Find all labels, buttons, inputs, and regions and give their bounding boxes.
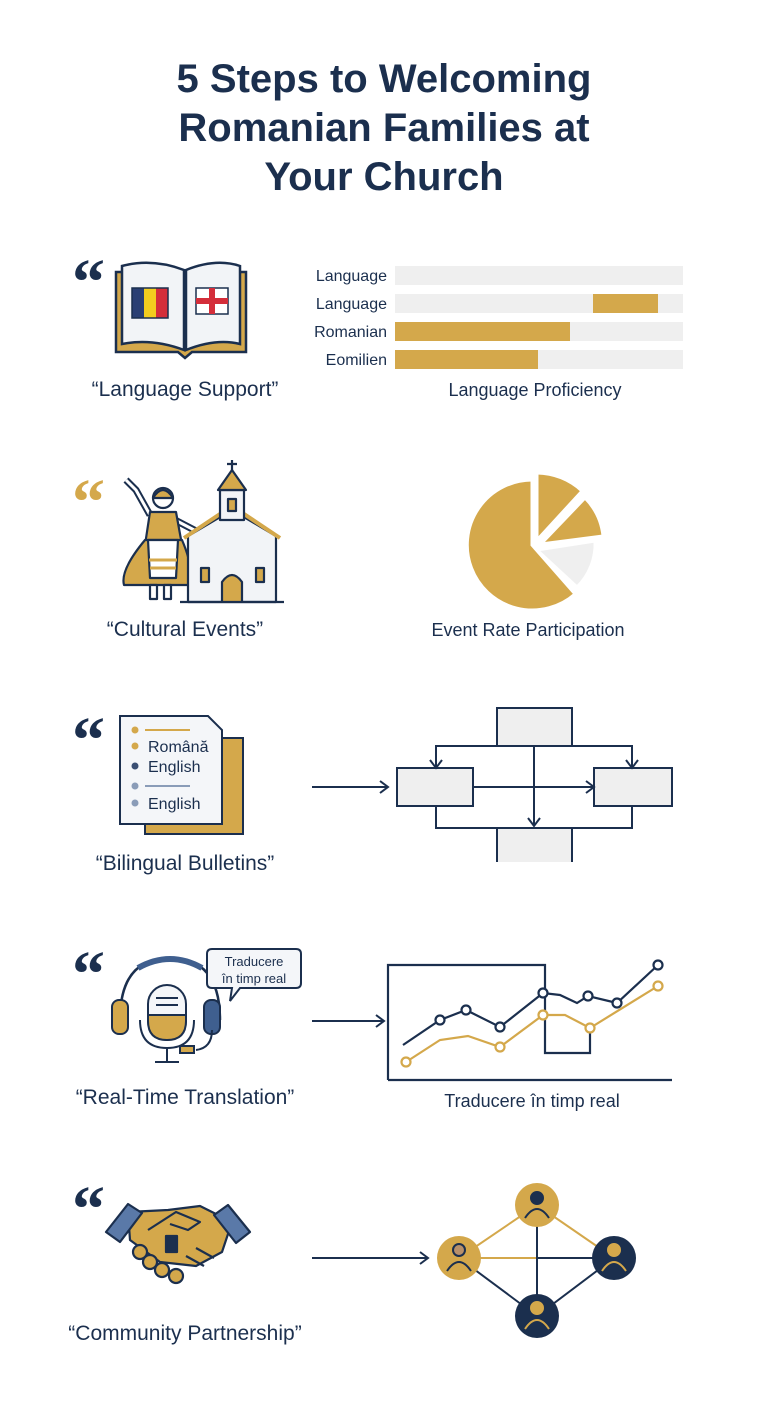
arrow [312,1252,428,1264]
icon: dancer and church [123,460,284,602]
title [177,57,591,199]
icon: quote mark gold: “ [72,466,105,539]
callout: speech bubble: Traducere [225,954,283,969]
label: community partnership: “Community Partnership” [68,1322,302,1345]
title: Your Church [264,155,504,199]
label: language support: “Language Support” [92,378,278,401]
label: real-time translation: “Real-Time Translation” [76,1086,294,1109]
panel: real-time translation [72,938,672,1111]
icon: handshake [106,1204,250,1283]
title: Romanian Families at [178,106,590,150]
icon: headset with microphone [112,958,220,1062]
bar chart: language proficiency: Language [316,296,387,313]
icon: quote mark: “ [72,1173,105,1246]
icon: bulletin document: Română [148,739,209,756]
label: cultural events: “Cultural Events” [107,618,263,641]
icon: quote mark: “ [72,704,105,777]
icon: quote mark: “ [72,246,105,319]
pie chart: event participation [467,473,603,610]
arrow [312,1015,384,1027]
panel: community partnership [68,1173,636,1345]
line chart [388,960,672,1080]
bar chart: language proficiency: Romanian [314,324,387,341]
bar chart: language proficiency: Eomilien [326,352,387,369]
bar chart: language proficiency [314,266,683,400]
caption: traducere in timp real: Traducere în timp real [444,1091,620,1111]
arrow [312,781,388,793]
network diagram [437,1183,636,1338]
callout: speech bubble: în timp real [221,971,286,986]
icon: bulletin document: English [148,759,200,776]
bar chart: language proficiency: Language Proficiency [448,380,622,400]
panel: bilingual bulletins [72,704,672,875]
icon: bulletin document: English [148,796,200,813]
bar chart: language proficiency: Language [316,268,387,285]
title: 5 Steps to Welcoming [177,57,591,101]
icon: quote mark: “ [72,938,105,1011]
label: bilingual bulletins: “Bilingual Bulletins” [96,852,274,875]
panel: language support [72,246,683,401]
callout: speech bubble [207,949,301,1001]
flowchart [397,708,672,862]
panel: cultural events [72,460,625,641]
icon: bulletin document [120,716,243,834]
caption: event rate participation: Event Rate Participation [431,620,625,640]
icon: book with flags [116,263,246,358]
